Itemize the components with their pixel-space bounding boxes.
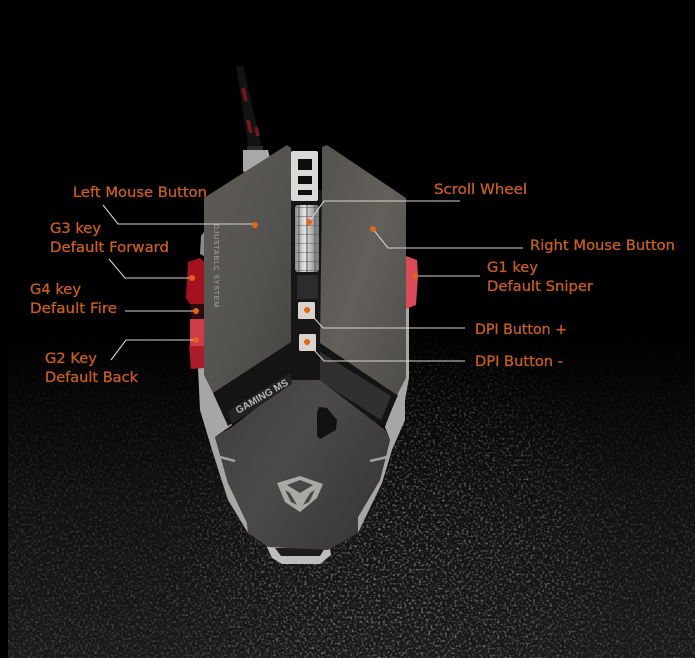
- palm notches: [220, 457, 387, 461]
- label: G2 key: G2 Key: [45, 351, 97, 367]
- gaming badge: GAMING MS: [234, 377, 291, 417]
- label: G3 key: [50, 221, 169, 256]
- black V band: [213, 342, 398, 427]
- label: G3 key: Default Forward: [50, 240, 169, 256]
- palm rest: [215, 380, 390, 550]
- callout lines: [103, 201, 523, 361]
- right mouse button: [320, 145, 406, 395]
- mouse illustration: [186, 66, 418, 564]
- label: right mouse button: Right Mouse Button: [530, 238, 675, 254]
- central spine: [290, 190, 322, 380]
- side key right: G1: [406, 256, 418, 309]
- silver chassis sides: [198, 290, 409, 564]
- label: G2 key: Default Back: [45, 370, 139, 386]
- label: G4 key: G4 key: [30, 282, 81, 298]
- label: G2 key: [45, 351, 139, 386]
- gaming badge: [228, 373, 292, 424]
- sideways print: adjustable system: DJUSTABLC SYSTEM: [212, 224, 219, 308]
- background: black fading to asphalt texture: [8, 336, 695, 658]
- band right highlight: [320, 352, 391, 420]
- cable: [236, 66, 270, 174]
- label: G4 key: Default Fire: [30, 301, 117, 317]
- label: G4 key: [30, 282, 117, 317]
- DPI buttons: [298, 302, 316, 351]
- label: G3 key: G3 key: [50, 221, 101, 237]
- label: G1 key: G1 key: [487, 260, 538, 276]
- spine block: [297, 275, 318, 299]
- label: G1 key: [487, 260, 593, 295]
- callout dots: [189, 219, 418, 345]
- label: scroll wheel: Scroll Wheel: [434, 182, 527, 198]
- label: left mouse button: Left Mouse Button: [73, 185, 207, 201]
- scroll wheel: [295, 205, 319, 272]
- palm window: [317, 407, 337, 439]
- silver vent plate: [291, 151, 318, 201]
- label: DPI button plus: DPI Button +: [475, 322, 567, 338]
- side keys left: [186, 232, 204, 369]
- label: G1 key: Default Sniper: [487, 279, 593, 295]
- logo: [277, 476, 323, 512]
- label: DPI button minus: DPI Button -: [475, 354, 563, 370]
- left mouse button: [204, 145, 291, 393]
